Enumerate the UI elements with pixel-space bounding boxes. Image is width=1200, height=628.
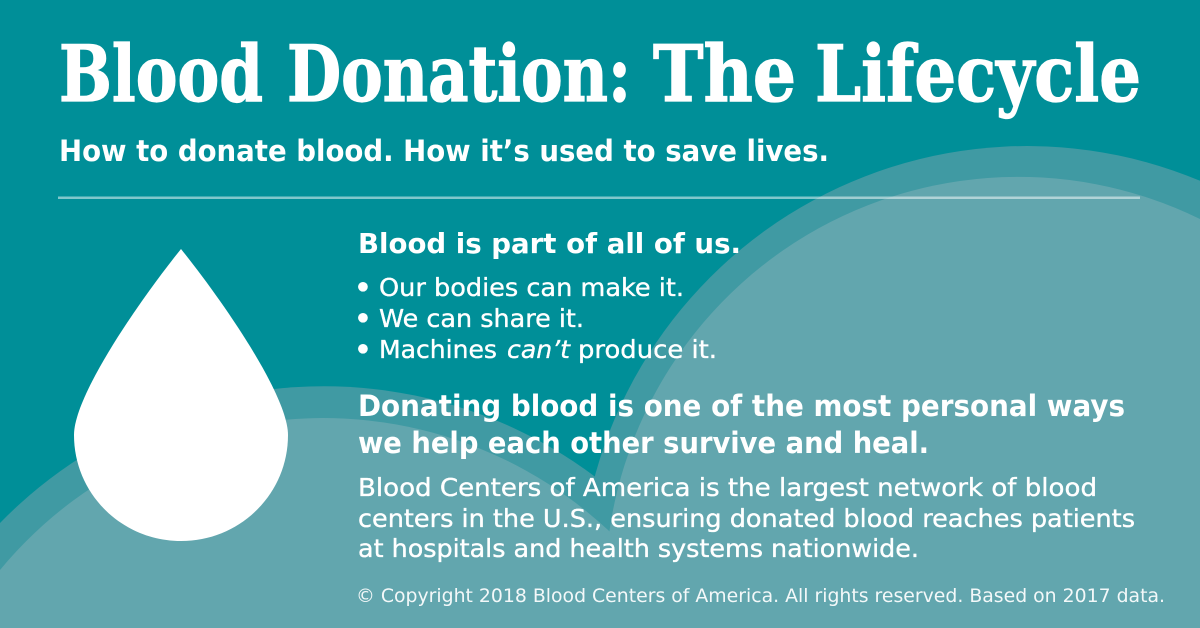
bullet: share it: We can share it. bbox=[379, 304, 584, 333]
bullet: bodies make it: Our bodies can make it. bbox=[379, 273, 684, 302]
bullet: machines cannot produce it: Machines bbox=[379, 335, 497, 364]
bullet: machines cannot produce it: can’t bbox=[507, 335, 571, 364]
divider rule bbox=[58, 196, 1140, 199]
title: The bbox=[653, 29, 796, 120]
title: Donation: bbox=[287, 29, 631, 120]
heading: most personal ways bbox=[358, 389, 1125, 460]
paragraph: about Blood Centers of America: at hospitals and health systems nationwide. bbox=[358, 534, 919, 563]
heading: most personal ways: Donating blood is one of the most personal ways bbox=[358, 389, 1125, 423]
bullet: machines cannot produce it: • bbox=[354, 331, 372, 369]
bullet: share it bbox=[354, 300, 584, 338]
bullet: bodies make it bbox=[354, 269, 684, 307]
bullet list bbox=[354, 269, 717, 369]
background arcs bbox=[0, 146, 1200, 628]
bullet: share it: • bbox=[354, 300, 372, 338]
title bbox=[59, 29, 1141, 120]
bullet: bodies make it: • bbox=[354, 269, 372, 307]
paragraph: about Blood Centers of America: centers in the U.S., ensuring donated blood reaches patients bbox=[358, 504, 1135, 533]
paragraph: about Blood Centers of America bbox=[358, 473, 1135, 563]
title: Lifecycle bbox=[815, 29, 1141, 120]
icon: blood drop bbox=[74, 249, 288, 541]
title: Blood bbox=[59, 29, 263, 120]
subtitle: How to donate blood. How it’s used to save lives. bbox=[59, 134, 829, 168]
copyright footer: © Copyright 2018 Blood Centers of America. All rights reserved. Based on 2017 data. bbox=[356, 585, 1165, 607]
heading: blood is part of all of us: Blood is part of all of us. bbox=[358, 227, 741, 260]
bullet: machines cannot produce it: produce it. bbox=[578, 335, 717, 364]
paragraph: about Blood Centers of America: Blood Centers of America is the largest network of blood bbox=[358, 473, 1097, 502]
bullet: machines cannot produce it bbox=[354, 331, 717, 369]
heading: most personal ways: we help each other survive and heal. bbox=[358, 426, 929, 460]
